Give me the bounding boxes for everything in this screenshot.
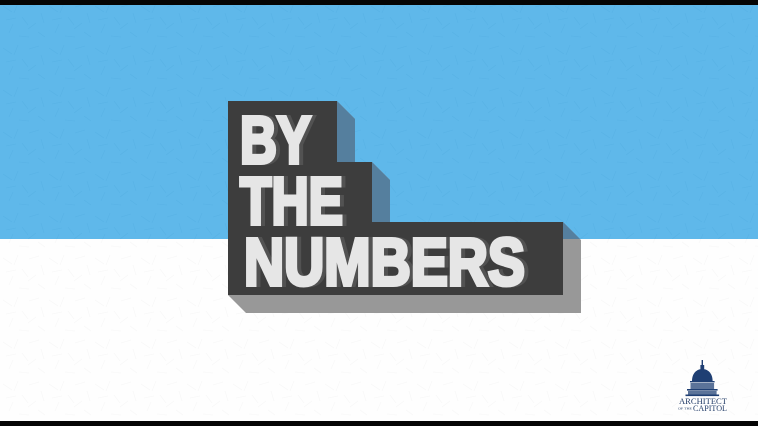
title text shadows: BY [244, 103, 315, 178]
title text: BY [240, 103, 311, 178]
title text shadows: THE [244, 164, 347, 239]
icon: capitol dome [686, 360, 719, 396]
block shadow on white [228, 101, 581, 313]
logo wordmark: ARCHITECT [679, 397, 727, 406]
title text shadows: NUMBERS [248, 225, 529, 300]
stepped dark block [228, 101, 563, 295]
top letterbox bar [0, 0, 758, 5]
bottom letterbox bar [0, 421, 758, 426]
title text: THE [240, 164, 343, 239]
logo wordmark: OF THE [678, 406, 692, 410]
title block: by the numbers [228, 101, 581, 313]
logo wordmark [678, 397, 727, 413]
logo: architect of the capitol [678, 360, 727, 413]
logo wordmark: CAPITOL [693, 404, 727, 413]
title text: NUMBERS [244, 225, 525, 300]
panel: blue upper background [0, 5, 758, 239]
panel: white lower background [0, 239, 758, 421]
title text [240, 103, 525, 300]
title text shadows [244, 103, 529, 300]
block shadow on blue [337, 101, 580, 239]
